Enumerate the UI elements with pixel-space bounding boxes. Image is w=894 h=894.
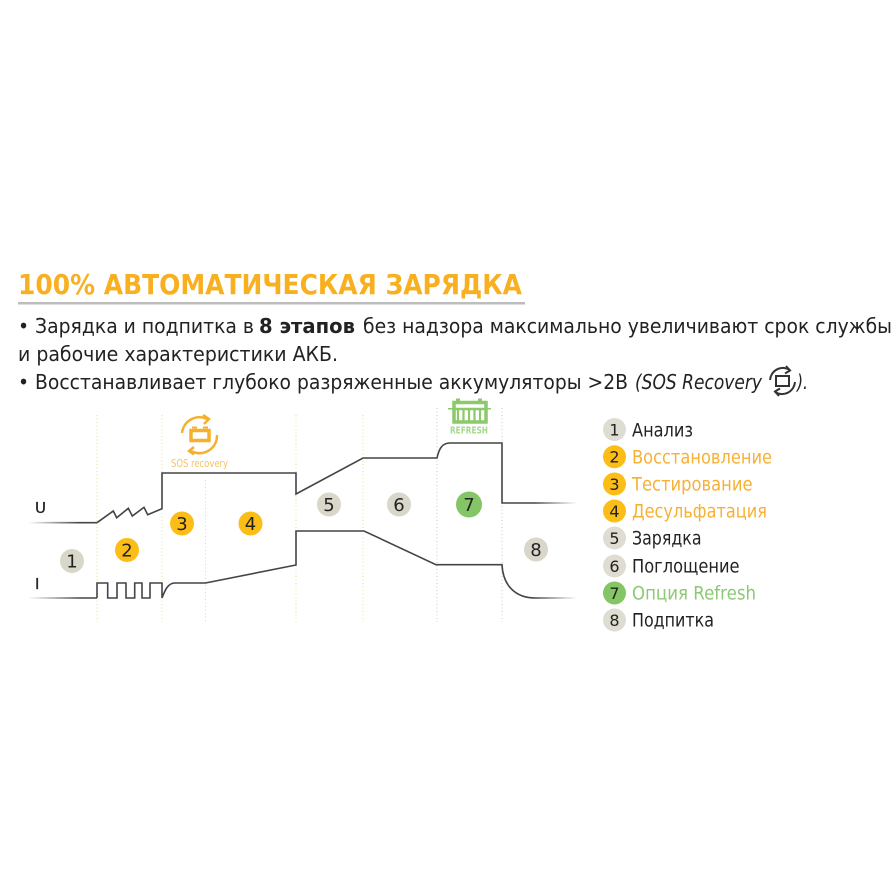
stage badges: 3 [176,514,188,535]
legend item 1: Анализ [632,420,693,442]
legend item 7: 7 [609,584,620,603]
legend item 8: 8 [609,611,620,630]
legend item 6: 6 [609,557,620,576]
stage badges: 2 [121,540,133,562]
legend item 2 [603,445,772,468]
legend item 4: Десульфатация [632,502,767,522]
stage badges: 4 [245,514,256,535]
legend item 6 [603,554,740,578]
I label: I [35,575,39,593]
legend item 3: 3 [609,475,620,494]
current curve [28,531,577,598]
chart: charging stages [28,408,577,622]
legend [603,418,772,632]
stage badges: 6 [393,495,405,516]
text block: description: и рабочие характеристики АКБ. [18,342,338,366]
title: 100% АВТОМАТИЧЕСКАЯ ЗАРЯДКА [18,268,522,301]
legend item 4: 4 [609,502,620,521]
stage badges: 5 [323,495,335,516]
icon: SOS recovery battery [182,415,217,454]
legend item 4 [603,500,767,522]
text block: description: ). [795,370,808,394]
text block: description: (SOS Recovery [635,370,763,394]
stage badges: 1 [66,552,78,572]
text block: description: • Восстанавливает глубоко разряженные аккумуляторы >2В [18,370,628,394]
legend item 6: Поглощение [632,556,740,578]
stage dividers [97,408,502,622]
legend item 5 [603,526,702,550]
legend item 3 [603,472,752,496]
legend item 5: 5 [609,529,620,548]
voltage curve [28,443,577,523]
icon: SOS recovery inline [770,366,795,396]
U label: U [35,499,46,517]
label: REFRESH: REFRESH [450,426,488,436]
legend item 7 [603,582,756,604]
legend item 8: Подпитка [632,610,714,632]
legend item 2: Восстановление [632,448,772,468]
text block: description: • Зарядка и подпитка в [18,314,254,338]
legend item 2: 2 [609,448,620,466]
legend item 7: Опция Refresh [632,584,756,604]
legend item 8 [603,608,714,632]
legend item 1: 1 [609,420,620,440]
label: SOS recovery: SOS recovery [171,458,228,470]
text block: description [18,314,892,394]
legend item 1 [603,418,693,442]
text block: description: 8 этапов [259,314,355,338]
stage badges: 8 [530,540,542,561]
legend item 5: Зарядка [632,528,702,550]
icon: refresh battery [448,398,491,422]
stage badges: 7 [463,495,475,516]
legend item 3: Тестирование [631,474,752,496]
stage badges [60,492,548,573]
